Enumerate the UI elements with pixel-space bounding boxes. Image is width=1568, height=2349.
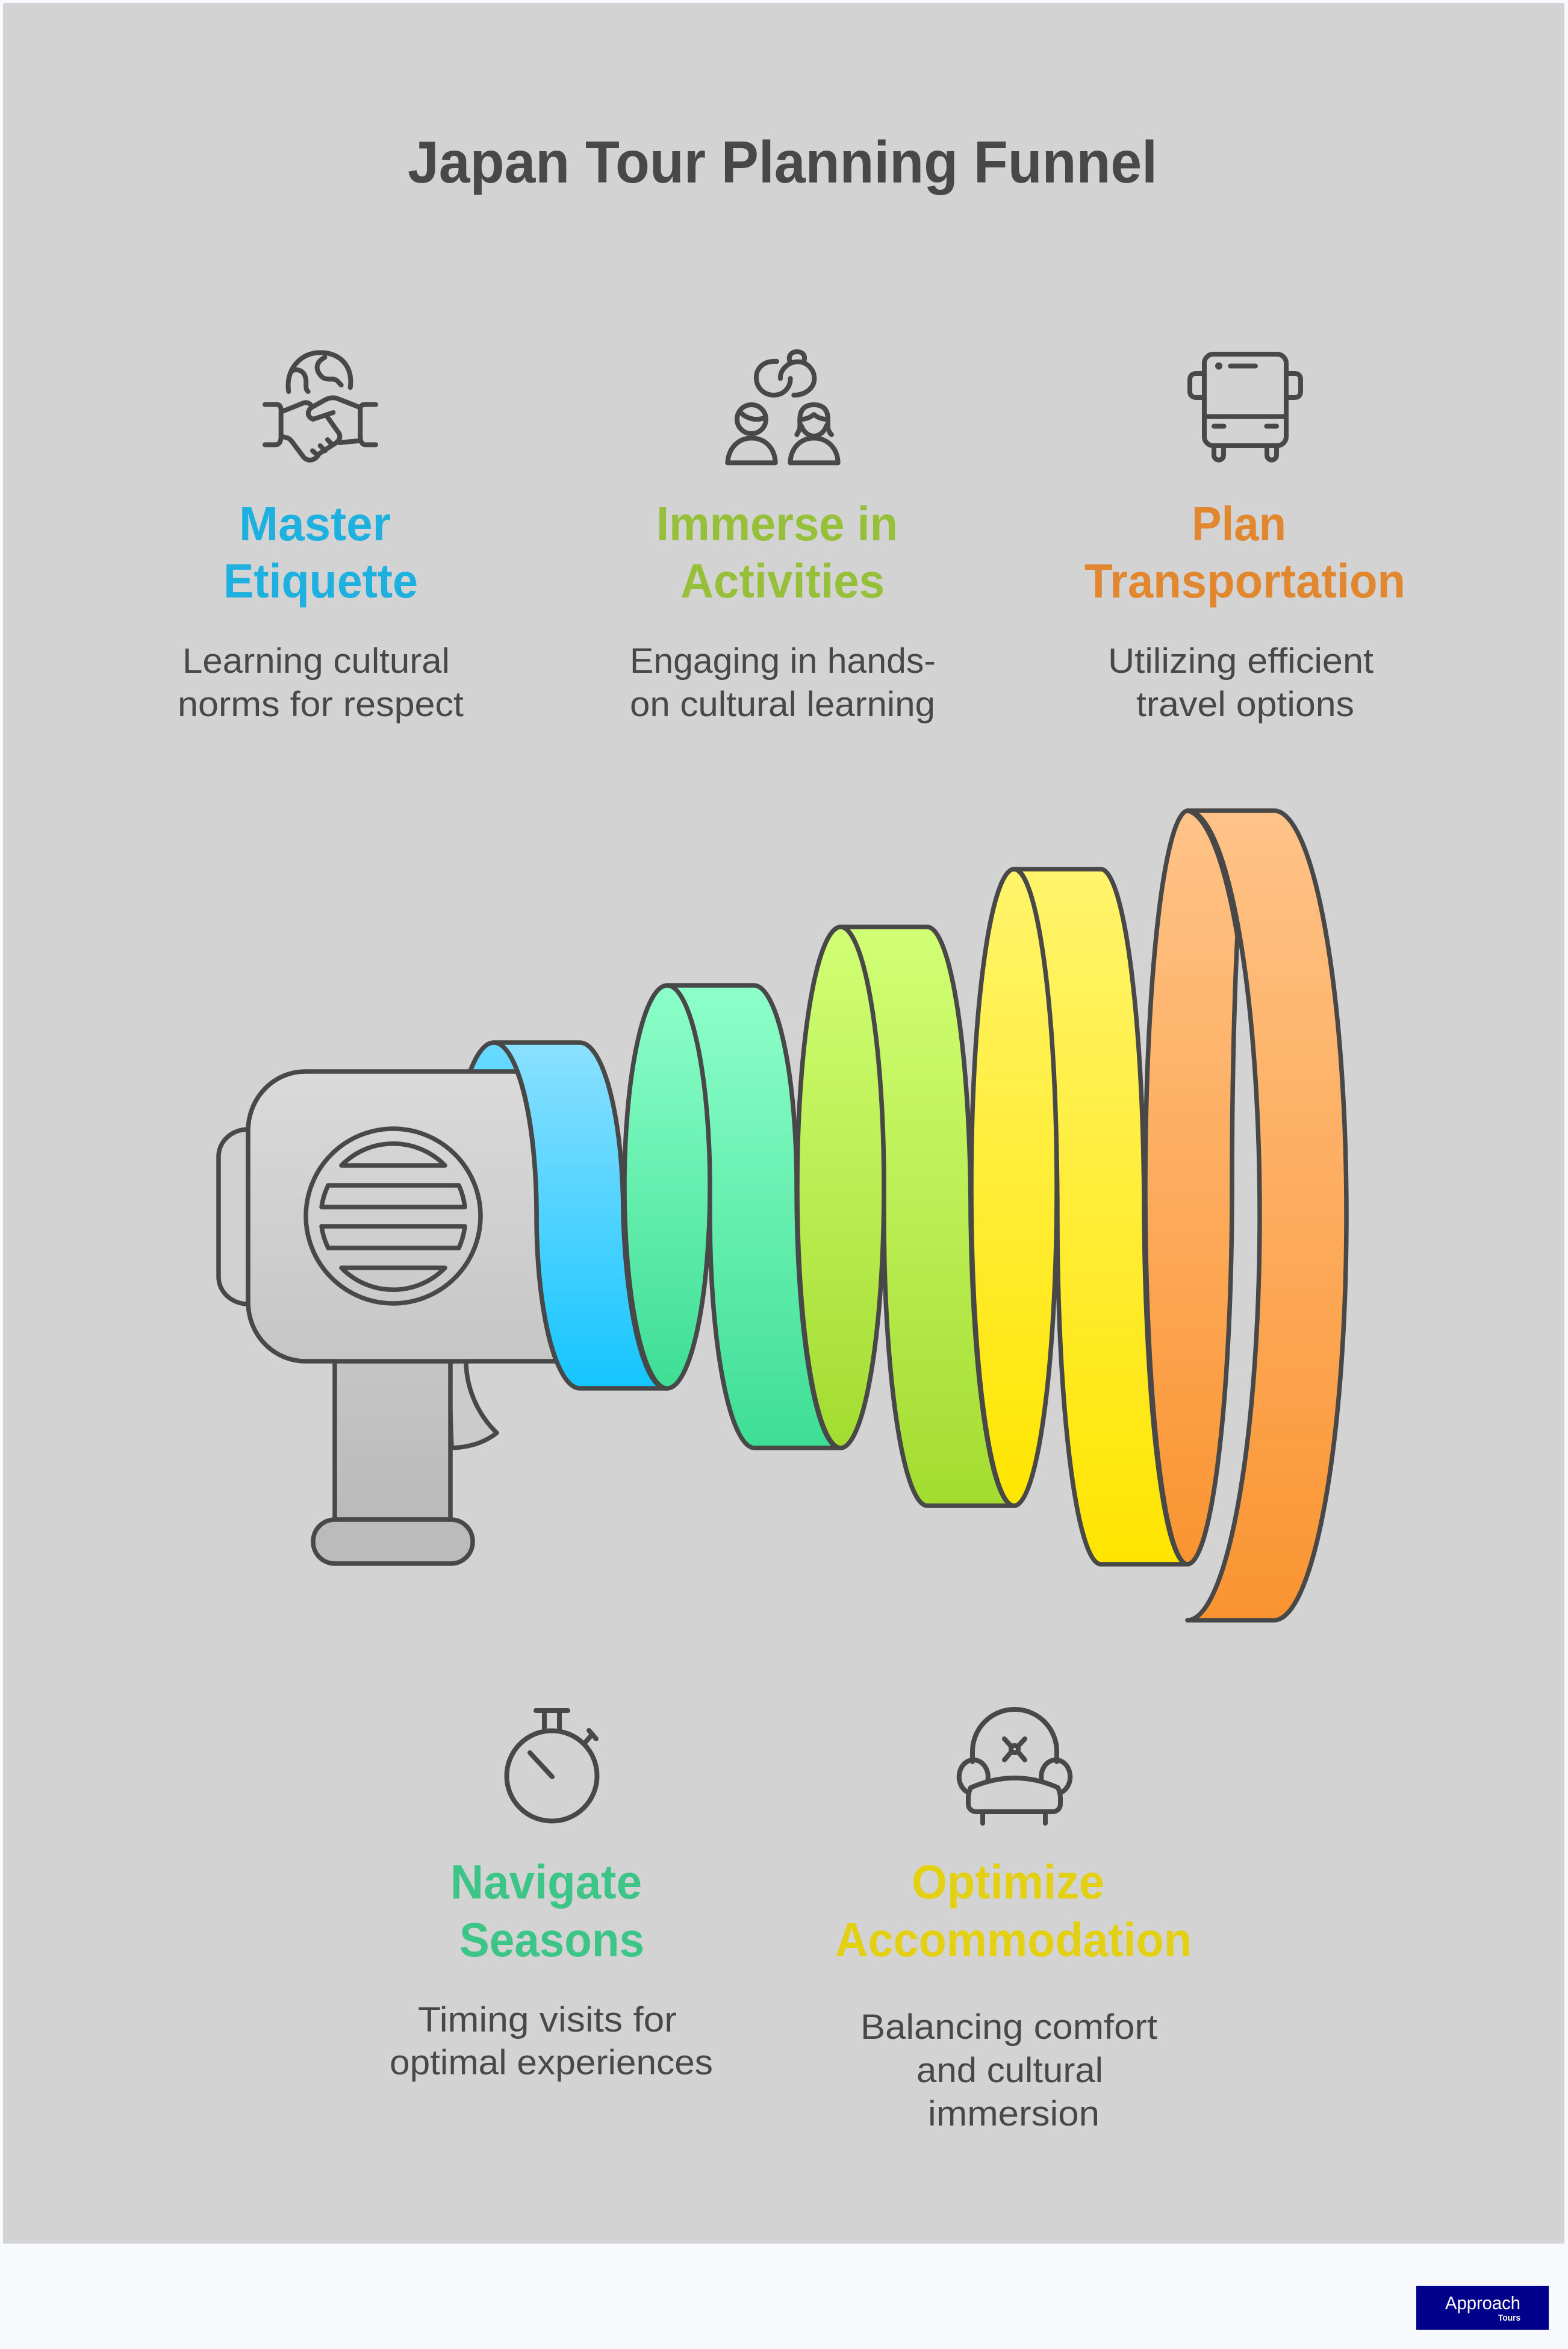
heading: plan transportation: Plan — [1192, 497, 1286, 551]
ribbon 3: lime band — [841, 927, 1014, 1506]
text: master etiquette description: norms for respect — [178, 685, 464, 724]
text: plan transportation description: Utilizing efficient — [1108, 641, 1374, 681]
megaphone trigger — [449, 1361, 497, 1448]
heading: immerse in activities — [656, 497, 898, 608]
text: immerse in activities description: on cultural learning — [630, 685, 935, 724]
ribbon 4: yellow front ellipse — [971, 869, 1057, 1506]
text: immerse in activities description: Engaging in hands- — [630, 641, 936, 681]
heading: optimize accommodation — [835, 1855, 1192, 1967]
text: master etiquette description: Learning cultural — [182, 641, 450, 681]
megaphone body — [248, 1072, 556, 1361]
ribbon 5: orange front lobe — [1145, 811, 1237, 1564]
title: Japan Tour Planning Funnel — [408, 129, 1157, 195]
heading: optimize accommodation: Accommodation — [835, 1913, 1192, 1967]
icon: globe and handshake — [265, 352, 376, 460]
heading: navigate seasons — [450, 1855, 644, 1967]
megaphone base — [313, 1520, 473, 1564]
ribbon 4: yellow band — [1014, 869, 1187, 1564]
text: navigate seasons description: optimal experiences — [390, 2043, 713, 2082]
ribbon 1: blue band — [494, 1043, 667, 1388]
logo: Approach Tours: Approach — [1445, 2292, 1520, 2313]
ribbon 2: green front ellipse — [624, 985, 710, 1388]
text: navigate seasons description — [390, 2000, 713, 2082]
megaphone rear cap — [219, 1129, 248, 1304]
text: master etiquette description — [178, 641, 464, 724]
text: plan transportation description — [1108, 641, 1374, 724]
heading: immerse in activities: Activities — [680, 554, 885, 608]
ribbon 3: lime front ellipse — [797, 927, 884, 1448]
megaphone handle — [335, 1361, 450, 1520]
text: plan transportation description: travel options — [1136, 685, 1354, 724]
ribbon 5: orange band — [1187, 811, 1346, 1620]
heading: master etiquette — [223, 497, 418, 608]
icon: bus — [1190, 354, 1301, 460]
logo: Approach Tours — [1416, 2286, 1549, 2330]
heading: immerse in activities: Immerse in — [656, 497, 898, 551]
heading: master etiquette: Master — [239, 497, 391, 551]
panel: immerse in activities — [630, 352, 936, 724]
text: immerse in activities description — [630, 641, 936, 724]
heading: optimize accommodation: Optimize — [912, 1855, 1104, 1909]
icon: stopwatch — [507, 1711, 597, 1821]
heading: navigate seasons: Navigate — [450, 1855, 642, 1909]
panel: optimize accommodation — [835, 1709, 1192, 2133]
icon: armchair — [959, 1709, 1070, 1823]
logo: Approach Tours: Tours — [1498, 2313, 1520, 2323]
panel: master etiquette — [178, 352, 464, 724]
text: navigate seasons description: Timing visits for — [418, 2000, 677, 2039]
icon: linked rings and two people — [727, 352, 838, 463]
ribbon 1: blue front ellipse top — [451, 1043, 537, 1215]
text: optimize accommodation description: immersion — [928, 2094, 1100, 2133]
heading: master etiquette: Etiquette — [223, 554, 418, 608]
funnel megaphone illustration — [219, 811, 1346, 1620]
megaphone speaker grille — [306, 1129, 481, 1303]
text: optimize accommodation description — [860, 2007, 1157, 2133]
panel: navigate seasons — [390, 1711, 713, 2082]
heading: plan transportation — [1084, 497, 1405, 608]
ribbon 2: green band — [667, 985, 841, 1448]
heading: navigate seasons: Seasons — [459, 1913, 644, 1967]
text: optimize accommodation description: Balancing comfort — [860, 2007, 1157, 2047]
heading: plan transportation: Transportation — [1084, 554, 1405, 608]
text: optimize accommodation description: and cultural — [916, 2051, 1103, 2090]
panel: plan transportation — [1084, 354, 1405, 724]
